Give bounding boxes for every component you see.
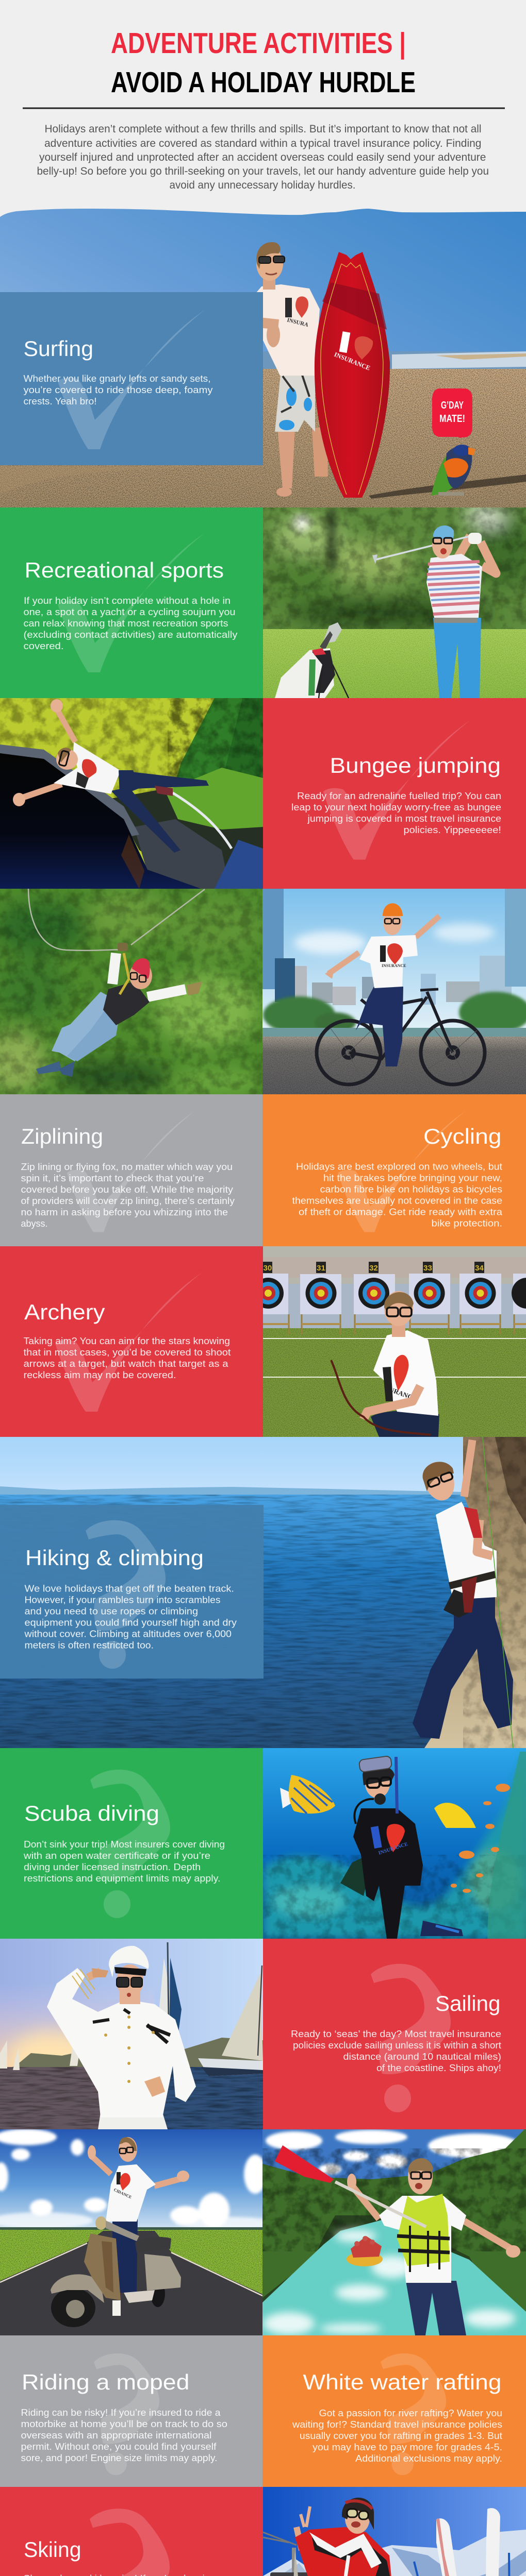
body text: policies exclude sailing unless it is within a short — [293, 2040, 501, 2050]
rider: CIDANCE — [113, 2188, 133, 2200]
golfer — [372, 526, 496, 698]
body text: Holidays are best explored on two wheels, but — [296, 1161, 502, 1172]
photo: rider on vintage moped — [0, 2129, 278, 2335]
body text — [292, 1161, 503, 1228]
section: bungee jumping — [0, 698, 526, 889]
lane numbers: 32 — [369, 1264, 378, 1273]
photo: sailor saluting with yachts — [0, 1939, 263, 2129]
body text: that in most cases, you’d be covered to shoot — [24, 1347, 231, 1358]
paddle — [335, 2182, 426, 2227]
body text: without cover. Climbing at altitudes over 6,000 — [24, 1629, 232, 1639]
heading: Surfing: Surfing — [24, 336, 93, 361]
intro text: yourself injured and unprotected after an accident overseas could easily send your adventure — [39, 151, 486, 163]
body text: distance (around 10 nautical miles) — [343, 2052, 501, 2062]
intro text: avoid any unnecessary holiday hurdles. — [169, 179, 356, 191]
body text: permit. Without one, you could find yourself — [21, 2442, 217, 2452]
body text: of theft or damage. Get ride ready with extra — [299, 1207, 503, 1217]
scuba diver — [340, 1756, 463, 1939]
scuba diver: INSURANCE — [378, 1841, 409, 1856]
watermark: tick — [67, 1111, 195, 1232]
yachts — [0, 1942, 263, 2076]
lane numbers: 33 — [423, 1264, 432, 1273]
heading: Recreational sports — [25, 558, 224, 582]
rock face — [424, 1437, 526, 1748]
section: ziplining and cycling photos — [0, 889, 526, 1095]
heading: Skiing — [24, 2537, 81, 2562]
watermark: question mark — [94, 2353, 159, 2475]
road — [0, 2231, 262, 2335]
climber — [413, 1440, 513, 1739]
city skyline — [262, 889, 526, 1005]
body text: spin it, it’s important to check that you’re — [21, 1173, 204, 1183]
body text: motorbike at home you’ll be on track to do so — [21, 2419, 227, 2429]
body text: sore, and poor! Engine size limits may apply. — [21, 2453, 218, 2463]
body text: We love holidays that get off the beaten track. — [25, 1584, 234, 1594]
bright foliage and rocks above the river — [111, 788, 263, 889]
body text — [21, 1162, 235, 1229]
body text — [23, 1839, 225, 1884]
photo: archer and targets — [253, 1246, 526, 1437]
section: moped and rafting text — [0, 2335, 526, 2487]
body text: covered. — [24, 641, 64, 651]
body text: waiting for!? Standard travel insurance policies — [292, 2419, 502, 2430]
photo: rafter with paddle on rapids — [262, 2128, 526, 2335]
lane numbers: 30 — [264, 1264, 272, 1273]
lane numbers: 31 — [317, 1264, 325, 1273]
speech bubble: G'DAY MATE! — [432, 388, 472, 438]
section: moped and rafting photos — [0, 2128, 526, 2335]
photo: cyclist in city — [262, 889, 526, 1095]
body text: diving under licensed instruction. Depth — [24, 1862, 201, 1872]
body text — [291, 2029, 501, 2073]
surfer: INSURA — [286, 317, 309, 328]
body text — [292, 2408, 502, 2464]
platform — [215, 840, 263, 889]
body text: no harm in asking before you whizzing into the — [21, 1207, 228, 1217]
body text: Zip lining or flying fox, no matter which way you — [21, 1162, 233, 1172]
photo: skier with skis in snow — [263, 2487, 526, 2576]
intro text: belly-up! So before you go thrill-seeking on your travels, let our handy adventure guide help you — [37, 165, 489, 177]
body text: policies. Yippeeeeee! — [403, 825, 501, 835]
body text: Additional exclusions may apply. — [355, 2453, 502, 2464]
photo: surfer on the beach with surfboard — [0, 209, 526, 507]
body text: Ready for an adrenaline fuelled trip? You can — [297, 791, 501, 801]
title: AVOID A HOLIDAY HURDLE — [111, 66, 416, 99]
bungee jumper — [13, 699, 209, 853]
surfboard — [315, 252, 390, 498]
body text — [24, 596, 237, 651]
panel: bungee jumping text — [263, 698, 526, 889]
heading: Ziplining — [21, 1124, 103, 1148]
body text: overseas with an appropriate international — [21, 2430, 211, 2441]
intro text: adventure activities are covered as standard within a typical travel insurance policy. Finding — [44, 138, 481, 149]
bungee cord — [173, 793, 232, 849]
body text: carbon fibre bike on holidays as bicycles — [320, 1184, 502, 1194]
speech bubble: G'DAY MATE!: MATE! — [439, 413, 465, 425]
moped — [51, 2216, 181, 2327]
body text: crests. Yeah bro! — [24, 396, 96, 406]
body text — [291, 791, 501, 835]
body text: However, if your rambles turn into scrambles — [25, 1595, 220, 1605]
panel: archery text — [0, 1246, 263, 1437]
panel: cycling text — [262, 1094, 526, 1247]
watermark: question mark — [86, 1520, 166, 1669]
body text: Ready to ‘seas’ the day? Most travel insurance — [291, 2029, 501, 2039]
watermark: question mark — [90, 2509, 170, 2576]
watermark: question mark — [371, 1964, 451, 2112]
body text: jumping is covered in most travel insurance — [307, 814, 501, 824]
panel: hiking and climbing text — [0, 1505, 264, 1679]
body text: meters is often restricted too. — [25, 1640, 154, 1651]
archer kneeling — [331, 1291, 439, 1437]
section: sailing — [0, 1939, 526, 2129]
section: ziplining and cycling text — [0, 1094, 526, 1247]
heading: Riding a moped — [22, 2370, 190, 2394]
body text: leap to your next holiday worry-free as bungee — [291, 802, 501, 812]
body text — [24, 1584, 237, 1651]
photo: bungee jumper — [0, 698, 263, 889]
body text: reckless aim may not be covered. — [24, 1370, 176, 1380]
gondola — [263, 2532, 312, 2576]
golf bag and clubs — [275, 622, 349, 698]
body text: If your holiday isn’t complete without a hole in — [24, 596, 231, 606]
rider — [88, 2137, 189, 2293]
section: surfing — [0, 209, 526, 507]
fish: angelfish — [280, 1775, 335, 1814]
body text: equipment you could find yourself high and dry — [25, 1618, 237, 1628]
surfer — [256, 242, 320, 497]
lane numbers — [263, 1262, 484, 1273]
bicycle — [317, 989, 485, 1084]
zipliner — [36, 943, 202, 1077]
fish: yellow butterflyfish — [434, 1803, 476, 1828]
heading: Sailing — [435, 1991, 500, 2015]
body text: can relax knowing that most recreation sports — [24, 618, 228, 629]
body text: of providers will cover zip lining, there’s certainly — [21, 1196, 235, 1206]
body text: (excluding contact activities) are automatically — [24, 630, 237, 640]
body text: usually cover you for rafting in grades 1-3. But — [300, 2431, 502, 2441]
watermark: tick — [58, 310, 205, 449]
rapids — [262, 2219, 526, 2335]
intro text — [37, 123, 489, 191]
archery targets — [253, 1274, 526, 1334]
cyclist — [325, 903, 439, 1066]
panel: ziplining text — [0, 1094, 262, 1247]
heading: Bungee jumping — [330, 753, 501, 777]
panel: riding a moped text — [0, 2335, 262, 2487]
watermark: question mark — [90, 1770, 170, 1918]
section: recreational sports — [0, 505, 526, 698]
body text: hit the brakes before bringing your new, — [323, 1173, 502, 1183]
section: skiing — [0, 2487, 526, 2576]
cyclist: INSURANCE — [382, 963, 406, 968]
photo: zipliner — [0, 889, 263, 1095]
body text: Don’t sink your trip! Most insurers cover diving — [24, 1839, 225, 1850]
body text: covered before you take off. While the majority — [21, 1184, 233, 1195]
section: hiking and climbing — [0, 1437, 526, 1748]
heading: Archery — [24, 1300, 105, 1324]
heading: Hiking & climbing — [25, 1546, 204, 1570]
body text: themselves are usually not covered in the case — [292, 1195, 502, 1206]
body text: you may have to pay more for grades 4-5. — [313, 2442, 502, 2452]
body text: of the coastline. Ships ahoy! — [376, 2063, 501, 2073]
zipline cable — [28, 889, 205, 951]
intro text: Holidays aren’t complete without a few thrills and spills. But it’s important to know that not all — [44, 123, 482, 135]
photo: climber on sea cliff — [0, 1437, 526, 1748]
rafter — [275, 2145, 520, 2335]
body text: arrows at a target, but watch that target as a — [24, 1359, 229, 1369]
photo: golfer — [263, 505, 526, 698]
body text: bike protection. — [431, 1218, 502, 1228]
forested river banks — [262, 2128, 526, 2335]
body text: one, a spot on a yacht or a cycling soujurn you — [24, 607, 235, 617]
panel: recreational sports text — [0, 507, 263, 698]
river — [0, 753, 201, 889]
panel: skiing text — [0, 2487, 263, 2576]
body text: abyss. — [21, 1218, 47, 1229]
body text: and you need to use ropes or climbing — [25, 1606, 198, 1617]
raft — [347, 2236, 383, 2266]
watermark: tick — [338, 1111, 466, 1232]
photo: scuba diver on the reef — [263, 1748, 526, 1939]
heading: Scuba diving — [24, 1801, 159, 1825]
skis and poles — [414, 2508, 510, 2576]
title — [111, 27, 416, 99]
heading: Cycling — [423, 1124, 501, 1148]
body text: Whether you like gnarly lefts or sandy sets, — [24, 374, 210, 384]
lane numbers: 34 — [475, 1264, 484, 1273]
body text: Riding can be risky! If you’re insured to ride a — [21, 2408, 221, 2418]
title: ADVENTURE ACTIVITIES | — [111, 27, 406, 60]
skier — [289, 2498, 393, 2576]
body text: Got a passion for river rafting? Water you — [319, 2408, 502, 2418]
section: archery — [0, 1246, 526, 1437]
dark green hillside — [174, 698, 263, 787]
watermark: tick — [58, 533, 205, 672]
watermark: tick — [323, 720, 471, 859]
surfboard: INSURANCE — [333, 351, 371, 372]
section: scuba diving — [0, 1748, 526, 1939]
body text: you’re covered to ride those deep, foamy — [24, 385, 212, 395]
surfer's far leg — [312, 428, 328, 477]
panel: scuba diving text — [0, 1748, 263, 1939]
watermark: question mark — [381, 2353, 446, 2475]
speech bubble: G'DAY MATE!: G’DAY — [441, 400, 464, 411]
heading: White water rafting — [303, 2370, 501, 2394]
sailor in white uniform — [47, 1946, 196, 2129]
panel: white water rafting text — [262, 2335, 526, 2487]
panel: sailing text — [263, 1939, 526, 2129]
body text: restrictions and equipment limits may apply. — [24, 1873, 221, 1884]
body text — [24, 1336, 231, 1380]
body text — [24, 374, 212, 406]
panel: surfing text — [0, 292, 263, 465]
watermark: tick — [55, 1272, 203, 1412]
archer kneeling: SURANCE — [385, 1384, 418, 1402]
body text: Taking aim? You can aim for the stars knowing — [24, 1336, 230, 1346]
body text — [21, 2408, 227, 2463]
parrot — [431, 445, 475, 496]
body text: with an open water certificate or if you’re — [23, 1851, 210, 1861]
